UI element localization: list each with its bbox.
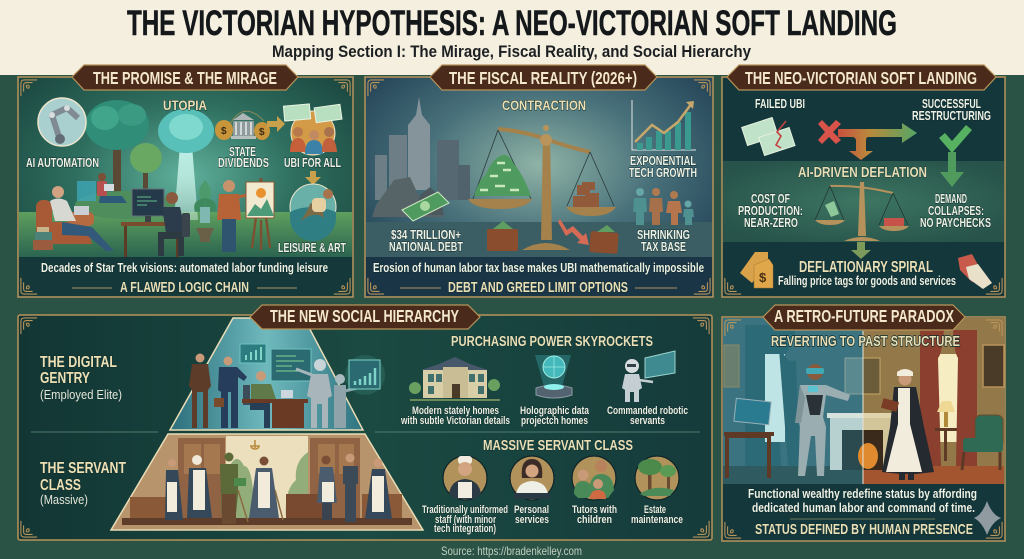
subtitle: Mapping Section I: The Mirage, Fiscal Reality, and Social Hierarchy	[272, 42, 751, 61]
balance scale	[815, 182, 909, 241]
label: tutors: Tutors with	[572, 504, 617, 516]
tree: large green	[85, 100, 149, 195]
panel: the new social hierarchy	[18, 315, 712, 540]
scene: past half	[858, 318, 1004, 485]
tier label: servant class: THE SERVANT	[40, 460, 126, 477]
icon: estate maintenance	[635, 456, 679, 500]
banner: retro-future paradox: A RETRO-FUTURE PARADOX	[774, 306, 954, 326]
icon: money bill	[402, 192, 449, 221]
label: tax base: TAX BASE	[641, 239, 686, 254]
icon: orange price tags: $	[759, 270, 767, 285]
arrows: split path	[838, 123, 917, 160]
heading: reverting: REVERTING TO PAST STRUCTURE	[771, 333, 960, 350]
bottom tier	[111, 434, 423, 530]
label: debt	[389, 227, 463, 254]
banner: fiscal reality	[430, 65, 657, 90]
caption band	[723, 484, 1004, 540]
hill	[75, 191, 175, 219]
heading: contraction: CONTRACTION	[502, 97, 586, 113]
heading: deflationary spiral: DEFLATIONARY SPIRAL	[799, 259, 933, 276]
books	[33, 227, 53, 250]
label: holographic: Holographic data	[520, 405, 590, 417]
label: holographic: projectch homes	[521, 415, 588, 427]
icon: stately home	[409, 357, 500, 400]
banner: new social hierarchy: THE NEW SOCIAL HIERARCHY	[270, 306, 459, 326]
money pile	[474, 155, 531, 196]
banner: promise and mirage: THE PROMISE & THE MIRAGE	[93, 68, 277, 88]
pyramid	[111, 318, 423, 530]
icon: uniformed staff	[443, 456, 487, 500]
tier label: servant class	[40, 460, 126, 507]
label: cost of production: NEAR-ZERO	[744, 216, 798, 230]
bricks	[573, 182, 599, 207]
figure: cyborg	[795, 364, 850, 476]
label: personal services: services	[515, 514, 549, 526]
ground	[19, 212, 352, 258]
icon: red x	[818, 120, 841, 144]
tier label: digital gentry: (Employed Elite)	[40, 387, 122, 402]
icon: AI automation	[38, 98, 86, 146]
plant	[194, 180, 216, 242]
figure: man in armchair	[36, 186, 114, 251]
icon: personal services	[510, 456, 554, 500]
arrow: down green	[940, 152, 964, 187]
label: cost of production	[738, 192, 803, 230]
chart: exponential growth	[632, 100, 696, 150]
banner: retro-future paradox	[763, 305, 965, 330]
heading: utopia: UTOPIA	[163, 97, 207, 113]
figure: programmer	[158, 192, 190, 256]
ground	[366, 222, 712, 258]
label: uniformed staff	[422, 504, 508, 535]
label: estate	[631, 504, 683, 526]
label: tutors	[572, 504, 617, 526]
banner: new social hierarchy	[250, 305, 480, 329]
label: estate: Estate	[644, 504, 666, 516]
label: holographic	[520, 405, 590, 427]
balance scale	[468, 125, 616, 250]
label: robot servants: Commanded robotic	[607, 405, 688, 417]
caption	[748, 486, 977, 515]
label: tech growth: TECH GROWTH	[629, 165, 697, 180]
top tier	[170, 318, 363, 430]
label: tax base: SHRINKING	[637, 227, 690, 242]
icon: state dividends bank and bags: $	[221, 126, 227, 137]
label: stately home: Modern stately homes	[412, 405, 499, 417]
tier label: digital gentry: GENTRY	[40, 370, 90, 387]
label: leisure and art: LEISURE & ART	[278, 241, 346, 255]
arrow: to UBI	[267, 116, 285, 132]
label: UBI for all: UBI FOR ALL	[284, 156, 341, 170]
icon: UBI for all	[283, 104, 342, 155]
figure: maid	[881, 369, 934, 480]
tree: glowing	[158, 109, 214, 220]
description: Falling price tags for goods and services	[778, 274, 956, 288]
panel: the neo-victorian soft landing	[722, 77, 1005, 297]
label: AI automation: AI AUTOMATION	[26, 156, 99, 170]
tree: small green	[130, 143, 162, 195]
icon: shrinking people	[633, 188, 694, 225]
heading: AI-driven deflation: AI-DRIVEN DEFLATION	[798, 164, 927, 181]
label: demand collapses: COLLAPSES:	[928, 204, 984, 218]
desk and monitor	[121, 189, 183, 257]
label: successful restructuring	[912, 97, 991, 123]
label: demand collapses	[920, 192, 991, 230]
sub-heading: DEBT AND GREED LIMIT OPTIONS	[448, 279, 628, 296]
icon: state dividends bank and bags: $	[259, 127, 265, 138]
icon: check	[939, 125, 972, 153]
label: tax base	[637, 227, 690, 254]
label: tech growth: EXPONENTIAL	[630, 153, 696, 168]
icon: state dividends bank and bags	[215, 111, 270, 140]
tier label: servant class: (Massive)	[40, 492, 88, 507]
label: debt: $34 TRILLION+	[391, 227, 461, 242]
heading: massive servant class: MASSIVE SERVANT CLASS	[483, 437, 633, 454]
icon: torn checks	[742, 118, 795, 156]
easel and painting	[246, 178, 274, 250]
banner: promise and mirage	[72, 65, 298, 90]
label: uniformed staff: staff (with minor	[435, 514, 497, 526]
figures: servant class	[165, 452, 392, 524]
banner: fiscal reality: THE FISCAL REALITY (2026+)	[449, 68, 637, 88]
arrow: falling red	[558, 219, 589, 245]
icon: tutors with children	[572, 456, 616, 500]
wallets	[487, 221, 619, 254]
label: uniformed staff: Traditionally uniformed	[422, 504, 508, 516]
label: stately home	[400, 405, 510, 427]
icon: holographic projector	[535, 355, 572, 398]
figure: sitting on grass	[97, 173, 127, 203]
label: tech growth	[629, 153, 697, 180]
label: demand collapses: DEMAND	[935, 192, 967, 206]
panel: the promise and the mirage	[18, 77, 353, 297]
label: estate: maintenance	[631, 514, 683, 526]
sub-heading: A FLAWED LOGIC CHAIN	[120, 279, 249, 296]
arrow: to leisure	[305, 171, 321, 185]
middle band	[723, 161, 1004, 242]
tier label: digital gentry: THE DIGITAL	[40, 354, 117, 371]
icon: leisure and art	[290, 184, 336, 241]
label: debt: NATIONAL DEBT	[389, 239, 463, 254]
label: uniformed staff: tech integration)	[434, 523, 496, 535]
banner: neo-victorian	[727, 65, 996, 90]
caption band	[366, 257, 712, 296]
tier label: servant class: CLASS	[40, 477, 81, 494]
caption: Decades of Star Trek visions: automated labor funding leisure	[41, 261, 328, 275]
label: state dividends	[218, 145, 269, 170]
label: failed UBI: FAILED UBI	[755, 97, 805, 111]
caption band	[19, 257, 352, 296]
scene: future half	[723, 318, 863, 485]
label: cost of production: COST OF	[751, 192, 790, 206]
label: stately home: with subtle Victorian details	[400, 415, 510, 427]
figures: digital gentry	[189, 354, 385, 428]
arrow: down olive	[851, 242, 871, 259]
label: personal services	[514, 504, 549, 526]
header band	[0, 0, 1024, 75]
label: demand collapses: NO PAYCHECKS	[920, 216, 991, 230]
heading: purchasing power: PURCHASING POWER SKYROCKETS	[451, 333, 653, 350]
label: robot servants	[607, 405, 688, 427]
tier label: digital gentry	[40, 354, 122, 402]
label: state dividends: STATE	[229, 145, 256, 159]
figure: painter	[217, 180, 254, 252]
icon: red and white tags	[958, 254, 992, 289]
icon: orange price tags	[740, 252, 773, 288]
label: successful restructuring: RESTRUCTURING	[912, 109, 991, 123]
label: successful restructuring: SUCCESSFUL	[922, 97, 981, 111]
label: personal services: Personal	[514, 504, 549, 516]
divider	[862, 331, 864, 484]
ruined skyline	[375, 97, 470, 200]
floating screen	[77, 181, 96, 201]
caption: Erosion of human labor tax base makes UBI mathematically impossible	[373, 261, 704, 275]
bottom band	[723, 242, 1004, 296]
label: tutors: children	[577, 514, 612, 526]
source line: Source: https://bradenkelley.com	[441, 544, 582, 558]
rubble	[372, 177, 444, 217]
label: robot servants: servants	[630, 415, 665, 427]
panel: the fiscal reality	[365, 77, 713, 297]
label: state dividends: DIVIDENDS	[218, 156, 269, 170]
icon: sparkle	[974, 501, 1001, 535]
label: cost of production: PRODUCTION:	[738, 204, 803, 218]
icon: robot servant	[622, 351, 675, 402]
panel: a retro-future paradox	[722, 317, 1005, 541]
